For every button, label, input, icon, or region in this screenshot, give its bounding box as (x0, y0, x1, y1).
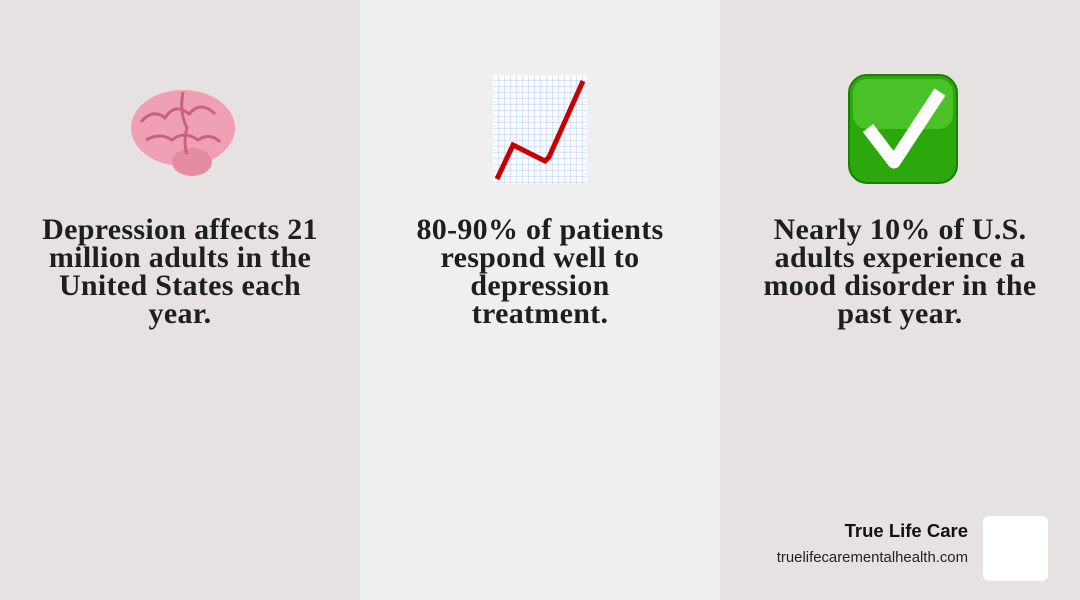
text: treatment stat: 80-90% of patients respond well to depression treatment. (416, 213, 664, 330)
brand name: True Life Care (845, 520, 968, 541)
logo box (983, 516, 1048, 581)
panel: mood disorder stat (720, 0, 1080, 600)
footer: brand (776, 516, 1048, 581)
text: mood disorder stat: Nearly 10% of U.S. adults experience a mood disorder in the past year. (764, 213, 1036, 330)
icon: check mark (848, 74, 958, 184)
panel: depression stat (0, 0, 360, 600)
icon: brain (131, 90, 235, 176)
panel: treatment stat (360, 0, 720, 600)
text: depression stat: Depression affects 21 million adults in the United States each year. (42, 213, 318, 330)
icon: chart increasing (493, 75, 587, 184)
brand url: truelifecarementalhealth.com (777, 550, 968, 566)
